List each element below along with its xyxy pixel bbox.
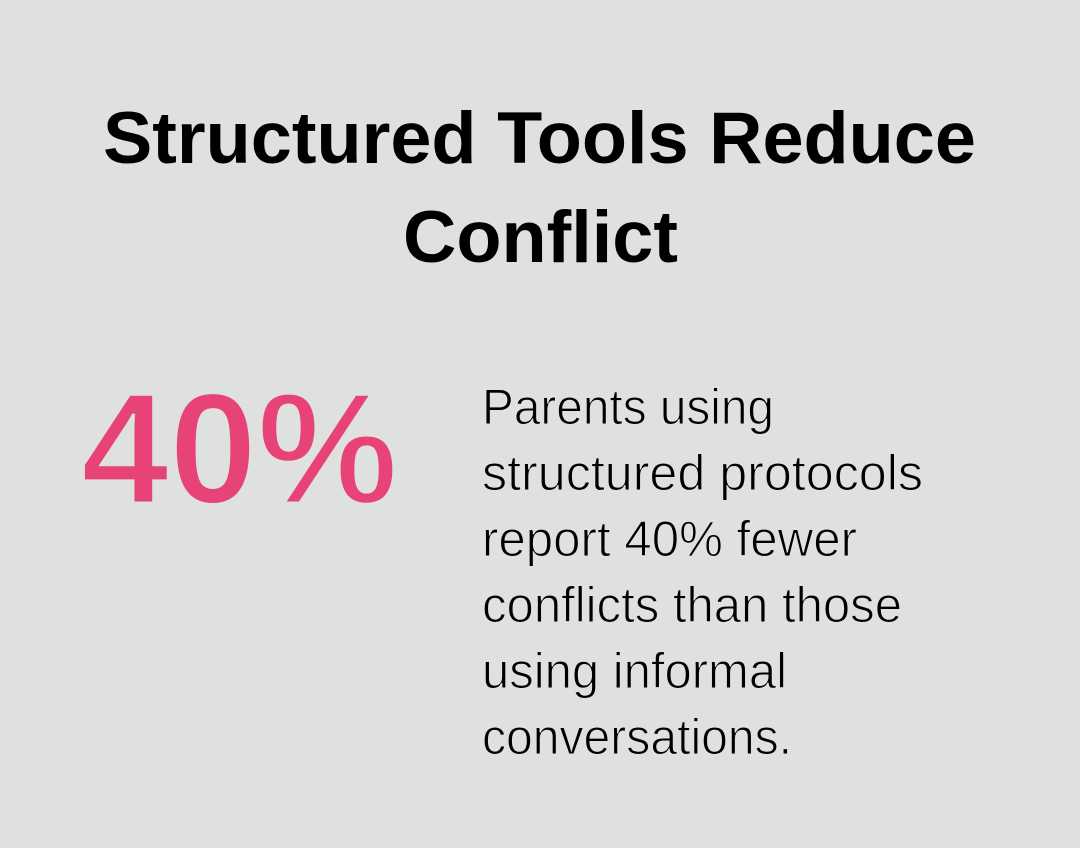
description text: Parents using — [482, 379, 774, 435]
description text — [482, 379, 923, 765]
title — [103, 98, 976, 278]
description text: structured protocols — [482, 445, 923, 501]
description text: report 40% fewer — [482, 511, 857, 567]
title: Conflict — [403, 197, 678, 278]
description text: conversations. — [482, 709, 792, 765]
title: Structured Tools Reduce — [103, 98, 976, 179]
big statistic: 40%: 40% — [81, 361, 398, 537]
description text: using informal — [482, 643, 787, 699]
description text: conflicts than those — [482, 577, 902, 633]
